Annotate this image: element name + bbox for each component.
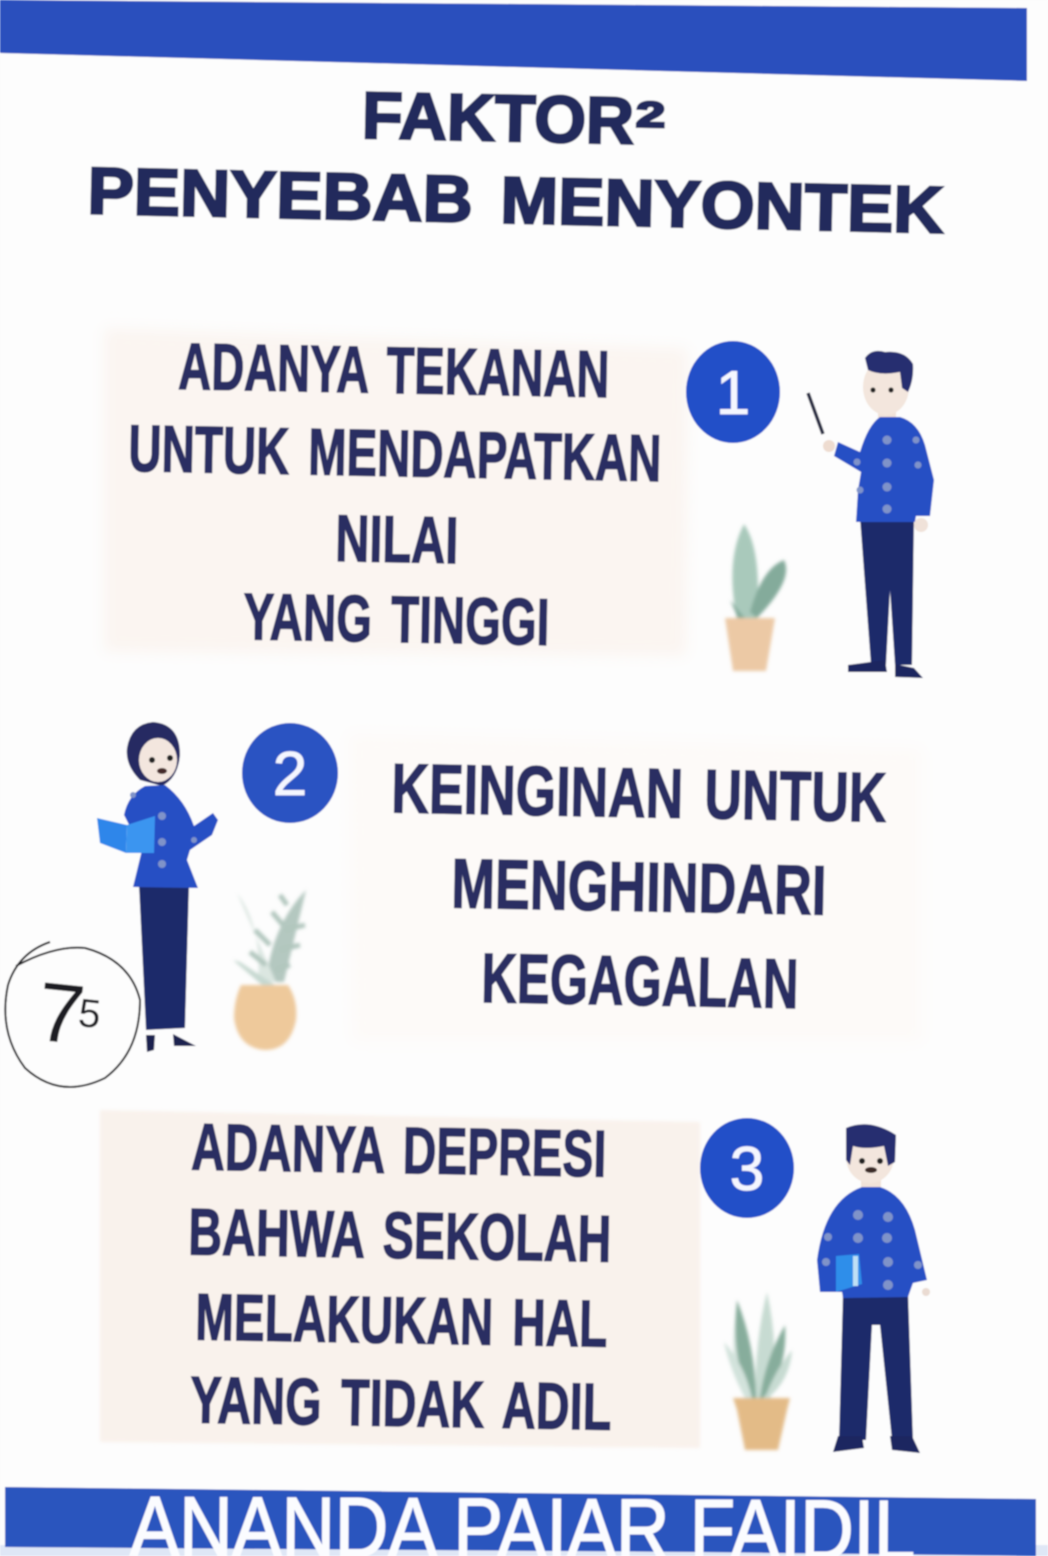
panel 3 text: BAHWA SEKOLAH xyxy=(188,1194,612,1276)
panel 3 text: ADANYA DEPRESI xyxy=(191,1109,607,1191)
panel 3 text: YANG TIDAK ADIL xyxy=(190,1362,612,1444)
top blue banner xyxy=(0,0,1027,81)
pointer xyxy=(808,393,823,434)
trousers xyxy=(839,1292,913,1440)
hair xyxy=(846,1124,896,1166)
panel 1 text xyxy=(128,329,662,659)
icon: student with book xyxy=(817,1124,930,1453)
title xyxy=(87,78,945,247)
feet xyxy=(146,1035,155,1052)
hand xyxy=(823,440,835,452)
trousers xyxy=(860,518,914,665)
shirt xyxy=(834,417,934,522)
score circle xyxy=(5,942,140,1087)
shoes xyxy=(848,660,887,672)
icon: plant 3 xyxy=(724,1292,792,1450)
panel 2 text xyxy=(391,749,887,1023)
shoes xyxy=(833,1436,864,1452)
panel 1 text: NILAI xyxy=(335,501,459,577)
number badge 3: 3 xyxy=(730,1135,764,1204)
panel 2 text: MENGHINDARI xyxy=(451,844,827,930)
panel 3 text: MELAKUKAN HAL xyxy=(195,1279,608,1361)
title line 1: FAKTOR xyxy=(361,78,635,158)
book xyxy=(836,1254,862,1292)
open book xyxy=(97,818,127,853)
icon: plant 1 xyxy=(725,524,786,671)
icon: woman with book xyxy=(97,722,218,1052)
face xyxy=(139,738,177,782)
panel 2 text: KEGAGALAN xyxy=(481,939,799,1023)
hijab xyxy=(127,722,180,786)
panel 1 text: UNTUK MENDAPATKAN xyxy=(128,411,662,495)
panel: factor 1 xyxy=(104,328,688,659)
number badge 2 xyxy=(242,723,338,823)
panel 1 background xyxy=(104,328,688,656)
panel 2 background xyxy=(348,733,922,1042)
panel 2 text: KEINGINAN UNTUK xyxy=(391,749,887,837)
hand right xyxy=(914,518,928,532)
blouse xyxy=(124,785,218,888)
hair xyxy=(865,351,913,392)
panel 3 text xyxy=(188,1109,612,1444)
panel: factor 2 xyxy=(348,733,922,1042)
panel 1 text: ADANYA TEKANAN xyxy=(178,329,610,411)
number badge 2: 2 xyxy=(273,740,307,809)
blouse motifs xyxy=(130,792,197,868)
panel: factor 3 xyxy=(100,1109,700,1448)
skirt xyxy=(139,885,189,1030)
neck and face xyxy=(878,400,896,422)
number badge 1 xyxy=(686,341,780,443)
shirt motifs xyxy=(822,1210,922,1290)
number badge 3 xyxy=(700,1118,794,1218)
hand xyxy=(922,1288,930,1296)
neck and face xyxy=(861,1170,881,1190)
bottom blue banner xyxy=(0,1479,1048,1556)
handwritten score: 7 xyxy=(33,964,89,1062)
shirt motifs xyxy=(854,436,922,514)
number badge 1: 1 xyxy=(716,359,750,428)
panel 1 text: YANG TINGGI xyxy=(243,579,550,659)
panel 3 background xyxy=(100,1110,700,1448)
shirt xyxy=(817,1187,927,1298)
hand drawn ring xyxy=(5,942,140,1087)
handwritten score: 5 xyxy=(76,991,103,1037)
icon: plant 2 xyxy=(233,890,306,1050)
title line 1: 2 xyxy=(636,94,666,135)
title line 2: PENYEBAB MENYONTEK xyxy=(87,153,945,247)
icon: teacher with pointer xyxy=(808,351,934,678)
